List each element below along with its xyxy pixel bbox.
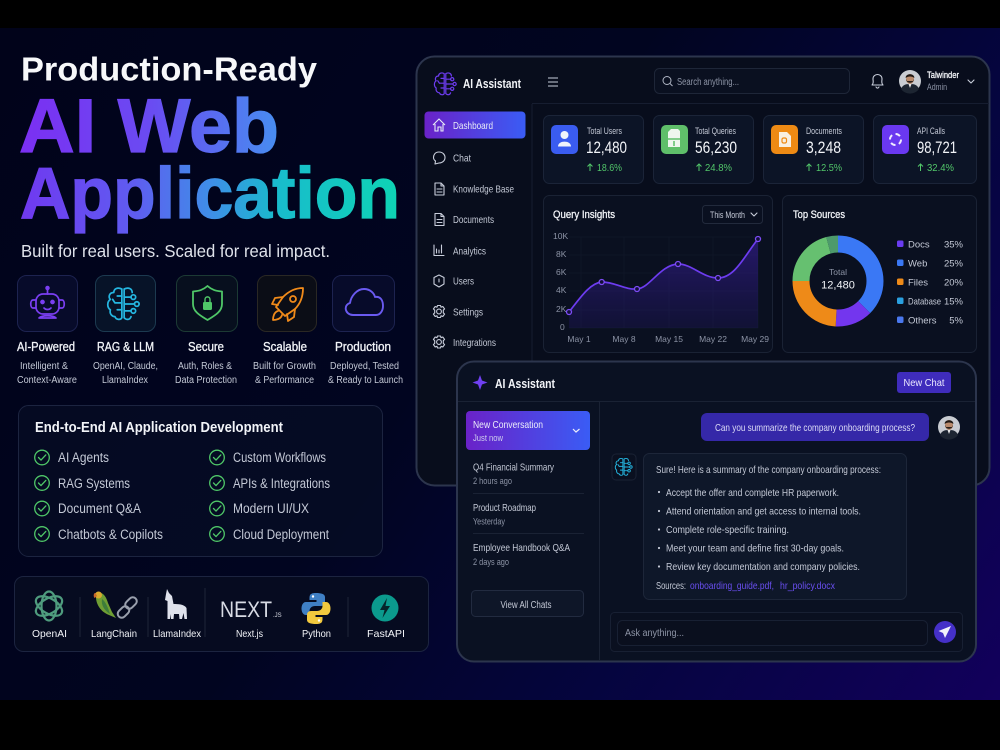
description xyxy=(253,361,316,386)
stat card: API Calls: 32.4% xyxy=(927,162,954,174)
icon: robot xyxy=(31,287,64,318)
logo: LlamaIndex: LlamaIndex xyxy=(153,628,202,640)
conversation: Product Roadmap: Yesterday xyxy=(473,516,505,526)
description xyxy=(175,361,237,386)
icon: rocket xyxy=(272,288,303,321)
conversation: New Conversation (active): Just now xyxy=(473,433,503,443)
checklist: Modern UI/UX xyxy=(233,501,309,516)
icon: shield xyxy=(193,286,222,320)
conversation: New Conversation (active): New Conversation xyxy=(473,419,543,431)
checklist: Chatbots & Copilots xyxy=(58,527,163,542)
logo: Python xyxy=(302,593,331,640)
nav item: Analytics xyxy=(434,245,486,258)
conversation: Q4 Financial Summary: 2 hours ago xyxy=(473,476,512,486)
stat card: Total Queries xyxy=(654,116,754,184)
stat card: Documents: Documents xyxy=(806,126,842,137)
brand: AI Assistant xyxy=(434,73,522,95)
donut chart xyxy=(801,244,875,318)
chat header: sparkle and title xyxy=(472,375,556,391)
bullet list: Attend orientation and get access to internal tools. xyxy=(666,506,861,518)
conversation: Employee Handbook Q&A: 2 days ago xyxy=(473,557,509,567)
nav item: Documents: Documents xyxy=(453,214,494,226)
description: Context-Aware xyxy=(17,375,77,386)
icon: bell xyxy=(872,74,883,88)
panel: chat window xyxy=(457,362,976,662)
feature: Production xyxy=(328,276,403,386)
panel: Query Insights line chart xyxy=(544,196,772,352)
assistant response card xyxy=(644,454,906,600)
legend xyxy=(897,240,964,326)
legend: Others xyxy=(908,316,937,326)
nav item: Settings: Settings xyxy=(453,306,483,318)
logo: Next.js xyxy=(220,597,282,640)
donut centre total: Total xyxy=(829,267,847,277)
stat card: Total Users: 12,480 xyxy=(586,138,627,157)
x axis labels: May 15 xyxy=(655,334,683,344)
assistant brain icon xyxy=(612,454,636,480)
nav item: Integrations xyxy=(433,336,496,349)
nav item: Chat xyxy=(434,152,471,164)
legend: 20% xyxy=(944,278,964,288)
user profile: Talwinder xyxy=(927,70,959,80)
bullet list: Complete role-specific training. xyxy=(666,524,789,536)
message input: Ask anything... xyxy=(625,628,684,639)
icon: menu xyxy=(548,78,558,86)
bullet list: Meet your team and define first 30-day goals. xyxy=(666,542,844,554)
description xyxy=(93,361,158,386)
dropdown: This Month: This Month xyxy=(710,210,745,220)
panel: Top Sources donut xyxy=(782,196,976,352)
panel: dashboard window xyxy=(416,56,990,486)
stat card: Total Users: 18.6% xyxy=(597,162,622,174)
logo: OpenAI: OpenAI xyxy=(32,628,67,640)
button: New Chat xyxy=(897,372,951,393)
y axis labels xyxy=(553,231,568,332)
y axis labels: 8K xyxy=(556,249,567,259)
logo: OpenAI xyxy=(32,592,67,640)
description: Built for Growth xyxy=(253,361,316,372)
panel heading: End-to-End AI Application Development xyxy=(35,420,283,436)
label: AI-Powered xyxy=(17,340,75,354)
description: & Performance xyxy=(255,375,314,386)
logo: Next.js: NEXT xyxy=(220,597,272,622)
heading: AI Web: AI Web xyxy=(19,84,279,169)
search box xyxy=(654,68,850,94)
stat card: API Calls: API Calls xyxy=(917,126,945,137)
panel: technology logos xyxy=(14,576,428,652)
assistant response card: Sure! Here is a summary of the company onboarding process: xyxy=(656,464,881,476)
y axis labels: 0 xyxy=(560,322,565,332)
nav item: Dashboard (active): Dashboard xyxy=(453,120,493,132)
bullet list: Accept the offer and complete HR paperwork. xyxy=(666,487,839,499)
chat header: sparkle and title: AI Assistant xyxy=(495,377,556,391)
user avatar xyxy=(938,416,960,440)
feature: RAG & LLM xyxy=(93,276,158,386)
user message bubble xyxy=(701,413,929,441)
stat card: Total Users xyxy=(544,116,644,184)
y axis labels: 4K xyxy=(556,285,567,295)
nav item: Analytics: Analytics xyxy=(453,246,486,258)
stat card: Total Queries: 56,230 xyxy=(695,138,737,157)
message input xyxy=(610,612,962,652)
panel: end-to-end development xyxy=(18,406,382,556)
checklist: Cloud Deployment xyxy=(233,527,329,542)
panel heading: Top Sources xyxy=(793,209,845,221)
stat card: Documents xyxy=(764,116,864,184)
logo: FastAPI xyxy=(367,594,405,640)
checklist: Custom Workflows xyxy=(233,450,326,465)
legend: 35% xyxy=(944,240,964,250)
logo: LangChain xyxy=(91,592,138,640)
stat card: Total Queries: Total Queries xyxy=(695,126,736,137)
nav item: Documents xyxy=(435,214,494,226)
bullet list: Review key documentation and company policies. xyxy=(666,561,860,573)
nav item: Integrations: Integrations xyxy=(453,337,496,349)
y axis labels: 10K xyxy=(553,231,568,241)
conversation: Q4 Financial Summary: Q4 Financial Summary xyxy=(473,462,555,474)
legend: Docs xyxy=(908,240,930,250)
x axis labels: May 22 xyxy=(699,334,727,344)
label: RAG & LLM xyxy=(97,340,154,354)
description: & Ready to Launch xyxy=(328,375,403,386)
legend: 25% xyxy=(944,258,964,270)
legend: 5% xyxy=(949,316,964,326)
title block xyxy=(19,50,400,261)
label: Production xyxy=(335,340,391,354)
description: LlamaIndex xyxy=(102,375,148,386)
stat card: Documents: 3,248 xyxy=(806,138,841,157)
x axis labels: May 29 xyxy=(741,334,769,344)
feature: Secure xyxy=(175,276,238,386)
nav item: Users xyxy=(434,275,474,288)
description xyxy=(328,361,403,386)
tagline: Built for real users. Scaled for real impact. xyxy=(21,241,330,261)
description: Intelligent & xyxy=(20,361,68,372)
conversation: Employee Handbook Q&A xyxy=(473,542,570,567)
nav item: Users: Users xyxy=(453,276,474,288)
label: Scalable xyxy=(263,340,307,354)
bullet list xyxy=(658,487,861,573)
nav item: Dashboard (active) xyxy=(424,112,526,138)
conversation: Q4 Financial Summary xyxy=(473,462,555,486)
data points xyxy=(566,236,760,314)
button: New Chat: New Chat xyxy=(904,377,945,389)
heading: Application: Application xyxy=(20,153,400,234)
nav item: Chat: Chat xyxy=(453,152,471,164)
description xyxy=(17,361,77,386)
user profile xyxy=(899,70,974,94)
x axis labels xyxy=(567,334,769,344)
nav item: Settings xyxy=(433,306,483,318)
nav item: Knowledge Base xyxy=(435,183,514,196)
checklist: APIs & Integrations xyxy=(233,476,330,491)
stat card: API Calls: 98,721 xyxy=(917,138,957,157)
legend: Files xyxy=(908,278,928,288)
logo: LangChain: LangChain xyxy=(91,628,137,640)
x axis labels: May 8 xyxy=(612,334,636,344)
feature: AI-Powered xyxy=(17,276,78,386)
legend: Web xyxy=(908,258,927,270)
checklist: AI Agents xyxy=(58,450,109,465)
button: View All Chats: View All Chats xyxy=(500,600,552,611)
chart heading: Query Insights xyxy=(553,209,615,221)
legend: 15% xyxy=(944,296,964,308)
x axis labels: May 1 xyxy=(567,334,591,344)
sources line: hr_policy.docx xyxy=(780,580,836,592)
icon: cloud xyxy=(346,289,383,315)
logo: Python: Python xyxy=(302,628,331,640)
heading: Production-Ready: Production-Ready xyxy=(21,50,318,88)
sources line xyxy=(656,580,836,592)
sources line: Sources: xyxy=(656,580,686,592)
description: Auth, Roles & xyxy=(178,361,232,372)
donut centre total: 12,480 xyxy=(821,280,855,292)
logo: LlamaIndex xyxy=(153,589,202,640)
logo: FastAPI: FastAPI xyxy=(367,628,405,640)
conversation: Product Roadmap xyxy=(473,502,536,526)
donut centre total xyxy=(821,267,855,292)
conversation: Product Roadmap: Product Roadmap xyxy=(473,502,536,514)
description: Data Protection xyxy=(175,375,237,386)
nav item: Knowledge Base: Knowledge Base xyxy=(453,184,514,196)
brand: AI Assistant: AI Assistant xyxy=(463,77,522,91)
stat card: Total Users: Total Users xyxy=(587,126,622,137)
description: OpenAI, Claude, xyxy=(93,361,158,372)
sources line: onboarding_guide.pdf, xyxy=(690,580,774,592)
search box: Search anything... xyxy=(677,77,739,88)
conversation: New Conversation (active) xyxy=(466,411,590,450)
description: Deployed, Tested xyxy=(330,361,399,372)
y axis labels: 6K xyxy=(556,267,567,277)
checklist: Document Q&A xyxy=(58,501,141,516)
checklist xyxy=(35,450,330,542)
stat card: Documents: 12.5% xyxy=(816,162,842,174)
logo: Next.js: .JS xyxy=(273,613,282,619)
data line xyxy=(569,239,758,312)
area under curve xyxy=(569,239,758,328)
legend: Database xyxy=(908,296,941,308)
y axis labels: 2K xyxy=(556,304,567,314)
sidebar navigation xyxy=(424,112,526,349)
label: Secure xyxy=(188,340,224,354)
conversation: Employee Handbook Q&A: Employee Handbook Q&A xyxy=(473,542,570,554)
logo: Next.js: Next.js xyxy=(236,628,263,640)
dropdown: This Month xyxy=(702,206,762,224)
user message bubble: Can you summarize the company onboarding process? xyxy=(715,422,915,434)
feature: Scalable xyxy=(253,276,316,386)
checklist: RAG Systems xyxy=(58,476,130,491)
send button xyxy=(934,621,956,643)
stat card: Total Queries: 24.8% xyxy=(705,162,732,174)
stat card: API Calls xyxy=(874,116,976,184)
user profile: Admin xyxy=(927,82,947,92)
icon: brain xyxy=(108,288,139,319)
button: View All Chats xyxy=(472,590,584,616)
